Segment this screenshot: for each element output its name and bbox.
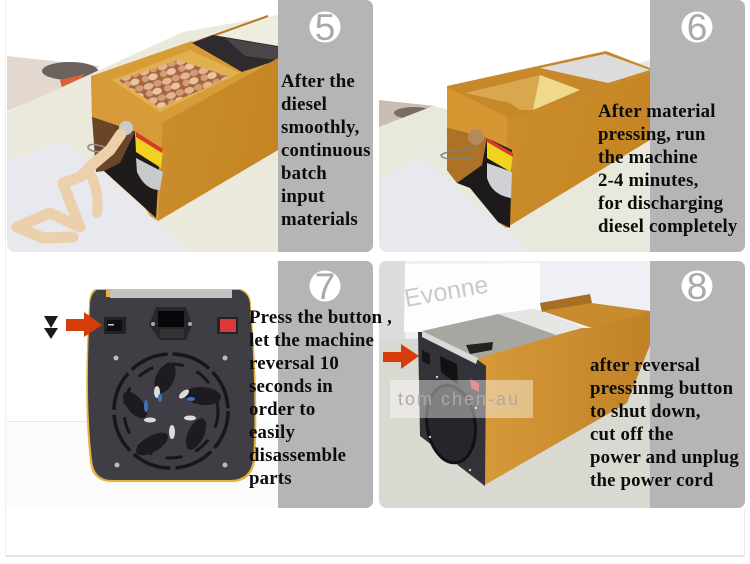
panel: step 8 — [379, 261, 745, 508]
badge: number 6 — [682, 12, 712, 42]
caption: step 7: order to — [249, 399, 315, 420]
grey caption column — [650, 261, 745, 508]
watermark: Evonne: Evonne — [402, 271, 491, 313]
red arrow — [66, 312, 102, 337]
badge: number 7: 7 — [315, 266, 335, 307]
grey caption column — [650, 0, 745, 252]
badge: number 7 — [310, 270, 340, 302]
caption: step 6: diesel completely — [598, 216, 738, 237]
caption text: diesel — [281, 94, 327, 115]
caption: step 6: for discharging — [598, 193, 724, 214]
badge: number 5: 5 — [315, 7, 335, 48]
grey caption column — [278, 261, 373, 508]
caption: step 6: the machine — [598, 147, 698, 168]
caption: step 6: pressing, run — [598, 124, 706, 145]
caption: step 8: pressinmg button — [590, 378, 734, 399]
power socket — [149, 307, 192, 340]
switch: red rocker — [217, 317, 238, 334]
caption text: input — [281, 186, 325, 207]
caption text: batch — [281, 163, 327, 184]
fan grille — [114, 354, 228, 468]
caption text: smoothly, — [281, 117, 360, 138]
caption text: materials — [281, 209, 358, 230]
caption text: After the — [281, 71, 355, 92]
photo: machine back panel — [7, 289, 256, 482]
caption: step 7: Press the button , — [249, 307, 392, 328]
caption: step 8: the power cord — [590, 470, 714, 491]
panel: step 7 — [7, 261, 373, 508]
grey caption column — [278, 0, 373, 252]
caption: step 6: 2-4 minutes, — [598, 170, 698, 191]
caption: step 6: After material — [598, 101, 716, 122]
photo: machine pressing peanuts — [7, 0, 278, 252]
caption: step 7: let the machine — [249, 330, 374, 351]
watermark box: tom...en-au — [390, 380, 533, 418]
caption text: continuous — [281, 140, 371, 161]
photo: machine running empty — [379, 51, 650, 252]
badge: number 8: 8 — [687, 266, 707, 307]
caption: step 7: reversal 10 — [249, 353, 339, 374]
icon: double down triangles — [44, 316, 58, 339]
panel: step 6 — [379, 0, 745, 252]
badge: number 8 — [682, 270, 712, 302]
photo: machine rear with arrow — [379, 261, 650, 508]
caption: step 8: after reversal — [590, 355, 700, 376]
watermark box: tom...en-au: tom chen-au — [398, 389, 520, 409]
caption: step 7: easily — [249, 422, 295, 443]
caption: step 8: to shut down, — [590, 401, 701, 422]
panel: step 5 — [7, 0, 373, 252]
caption: step 7: parts — [249, 468, 292, 489]
caption: step 8: cut off the — [590, 424, 674, 445]
caption: step 7: disassemble — [249, 445, 346, 466]
badge: number 5 — [310, 12, 340, 42]
badge: number 6: 6 — [687, 7, 707, 48]
caption: step 7: seconds in — [249, 376, 333, 397]
caption: step 8: power and unplug — [590, 447, 739, 468]
switch: black rocker — [104, 317, 126, 334]
